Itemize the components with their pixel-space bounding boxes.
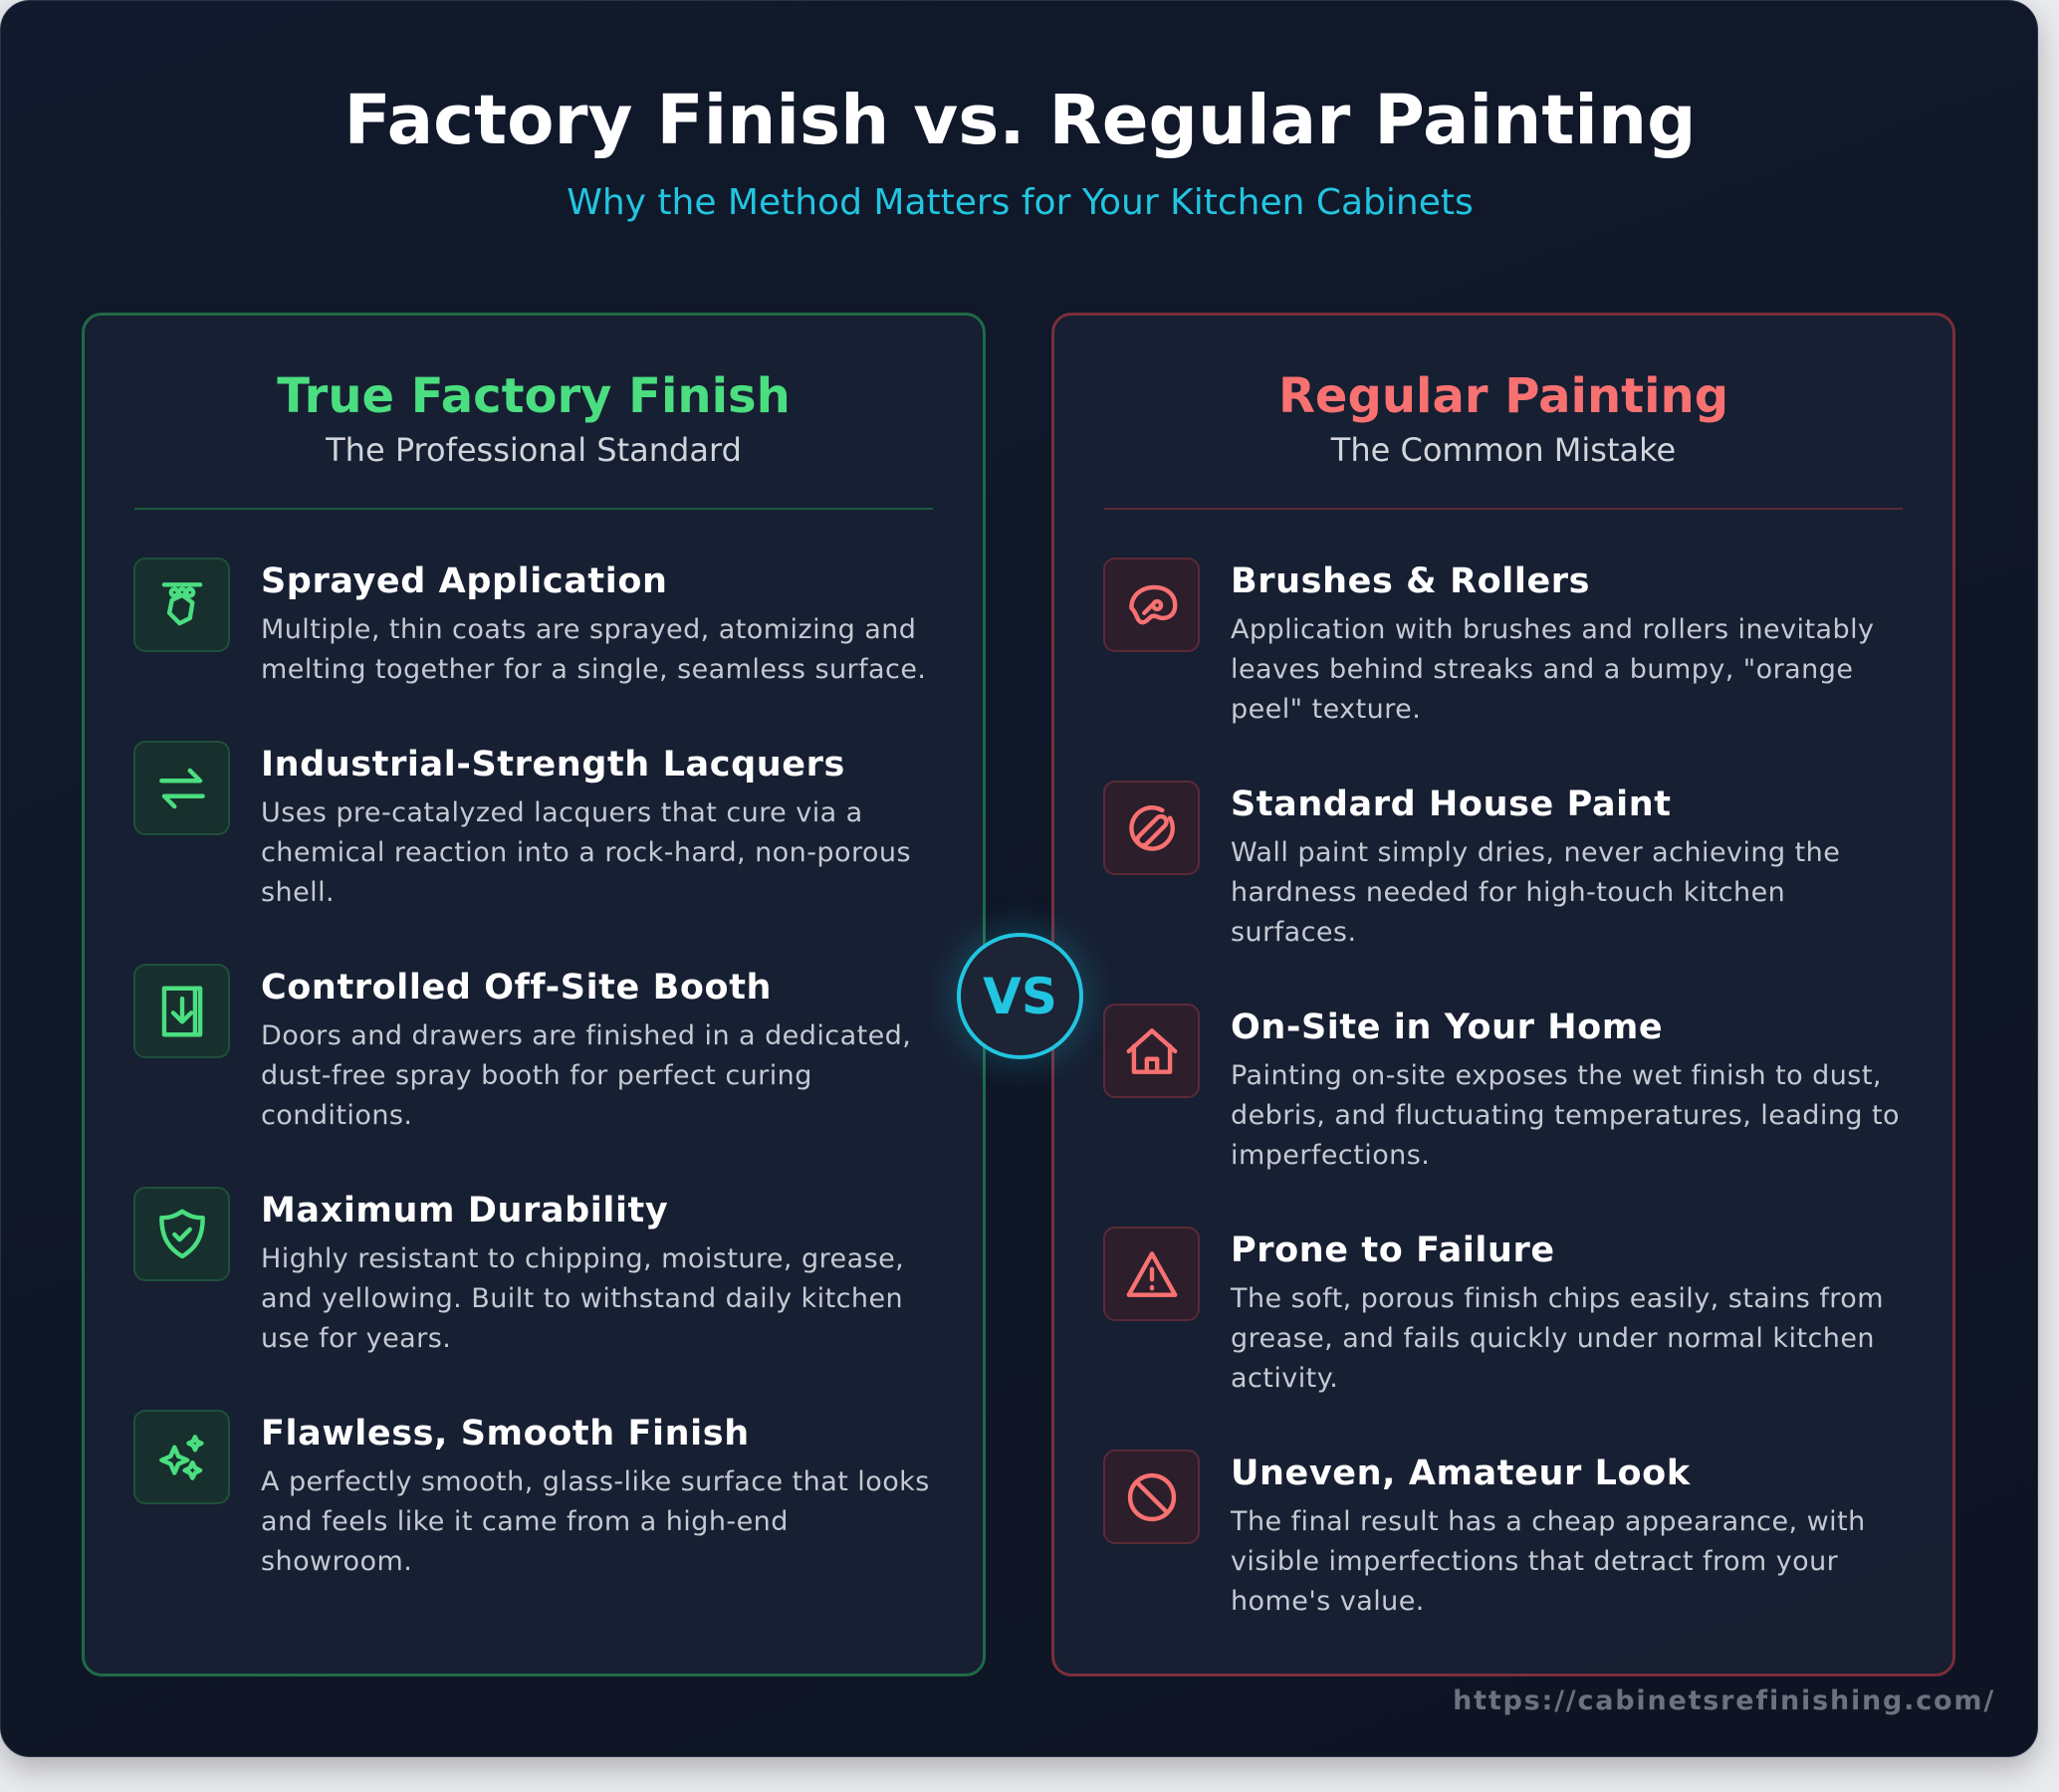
item: on-site: On-Site in Your Home bbox=[1231, 1008, 1663, 1047]
item: durability bbox=[133, 1187, 904, 1354]
item: failure bbox=[1103, 1227, 1884, 1394]
icon: house bbox=[1103, 1004, 1200, 1098]
icon: shield bbox=[133, 1187, 230, 1281]
item: smooth finish bbox=[133, 1410, 930, 1577]
item: durability: Highly resistant to chipping, moisture, grease, and yellowing. Built to withstand daily kitchen use for years. bbox=[261, 1243, 904, 1354]
item: sprayed application: Sprayed Application bbox=[261, 561, 667, 601]
item list: factory bbox=[133, 558, 930, 1577]
item: lacquers: Uses pre-catalyzed lacquers that cure via a chemical reaction into a rock-hard, non-porous shell. bbox=[261, 797, 911, 908]
panel: true factory finish bbox=[82, 313, 986, 1677]
icon: spray bbox=[133, 558, 230, 652]
item: on-site: Painting on-site exposes the wet finish to dust, debris, and fluctuating temperatures, leading to imperfections. bbox=[1231, 1060, 1900, 1171]
footer url: https://cabinetsrefinishing.com/ bbox=[1453, 1685, 1995, 1716]
item: lacquers: Industrial-Strength Lacquers bbox=[261, 745, 845, 784]
item: brushes: Brushes & Rollers bbox=[1231, 561, 1590, 601]
panel heading: Regular Painting bbox=[1278, 368, 1728, 424]
vs badge bbox=[957, 933, 1083, 1059]
subtitle: Why the Method Matters for Your Kitchen Cabinets bbox=[567, 182, 1474, 223]
item: smooth finish: A perfectly smooth, glass-like surface that looks and feels like it came from a high-end showroom. bbox=[261, 1466, 930, 1577]
panel subheading: The Professional Standard bbox=[326, 431, 742, 469]
vs badge: VS bbox=[983, 968, 1057, 1025]
item: sprayed application bbox=[133, 558, 926, 685]
icon: sparkles bbox=[133, 1410, 230, 1504]
item: durability: Maximum Durability bbox=[261, 1191, 668, 1231]
icon: palette bbox=[1103, 558, 1200, 652]
item: smooth finish: Flawless, Smooth Finish bbox=[261, 1414, 750, 1454]
item: amateur look bbox=[1103, 1450, 1866, 1617]
item: sprayed application: Multiple, thin coats are sprayed, atomizing and melting together for a single, seamless surface. bbox=[261, 614, 926, 685]
icon: booth bbox=[133, 964, 230, 1058]
item: brushes: Application with brushes and rollers inevitably leaves behind streaks and a bumpy, "orange peel" texture. bbox=[1231, 614, 1874, 725]
item: booth bbox=[133, 964, 911, 1131]
item: failure: The soft, porous finish chips easily, stains from grease, and fails quickly under normal kitchen activity. bbox=[1231, 1283, 1884, 1394]
item: house paint bbox=[1103, 781, 1840, 948]
item: brushes bbox=[1103, 558, 1874, 725]
title: Factory Finish vs. Regular Painting bbox=[344, 81, 1696, 160]
item list: regular bbox=[1103, 558, 1900, 1617]
item: on-site bbox=[1103, 1004, 1900, 1171]
item: booth: Controlled Off-Site Booth bbox=[261, 968, 772, 1008]
panel: regular painting bbox=[1051, 313, 1955, 1677]
item: failure: Prone to Failure bbox=[1231, 1231, 1555, 1270]
panel subheading: The Common Mistake bbox=[1331, 431, 1676, 469]
item: amateur look: The final result has a cheap appearance, with visible imperfections that detract from your home's value. bbox=[1231, 1506, 1866, 1617]
panel heading: True Factory Finish bbox=[277, 368, 791, 424]
item: lacquers bbox=[133, 741, 911, 908]
icon: circle slash pill bbox=[1103, 781, 1200, 875]
item: amateur look: Uneven, Amateur Look bbox=[1231, 1454, 1691, 1493]
item: house paint: Wall paint simply dries, never achieving the hardness needed for high-touch kitchen surfaces. bbox=[1231, 837, 1840, 948]
item: booth: Doors and drawers are finished in a dedicated, dust-free spray booth for perfect curing conditions. bbox=[261, 1020, 911, 1131]
icon: ban bbox=[1103, 1450, 1200, 1544]
icon: warning bbox=[1103, 1227, 1200, 1321]
item: house paint: Standard House Paint bbox=[1231, 784, 1672, 824]
icon: arrows bbox=[133, 741, 230, 835]
